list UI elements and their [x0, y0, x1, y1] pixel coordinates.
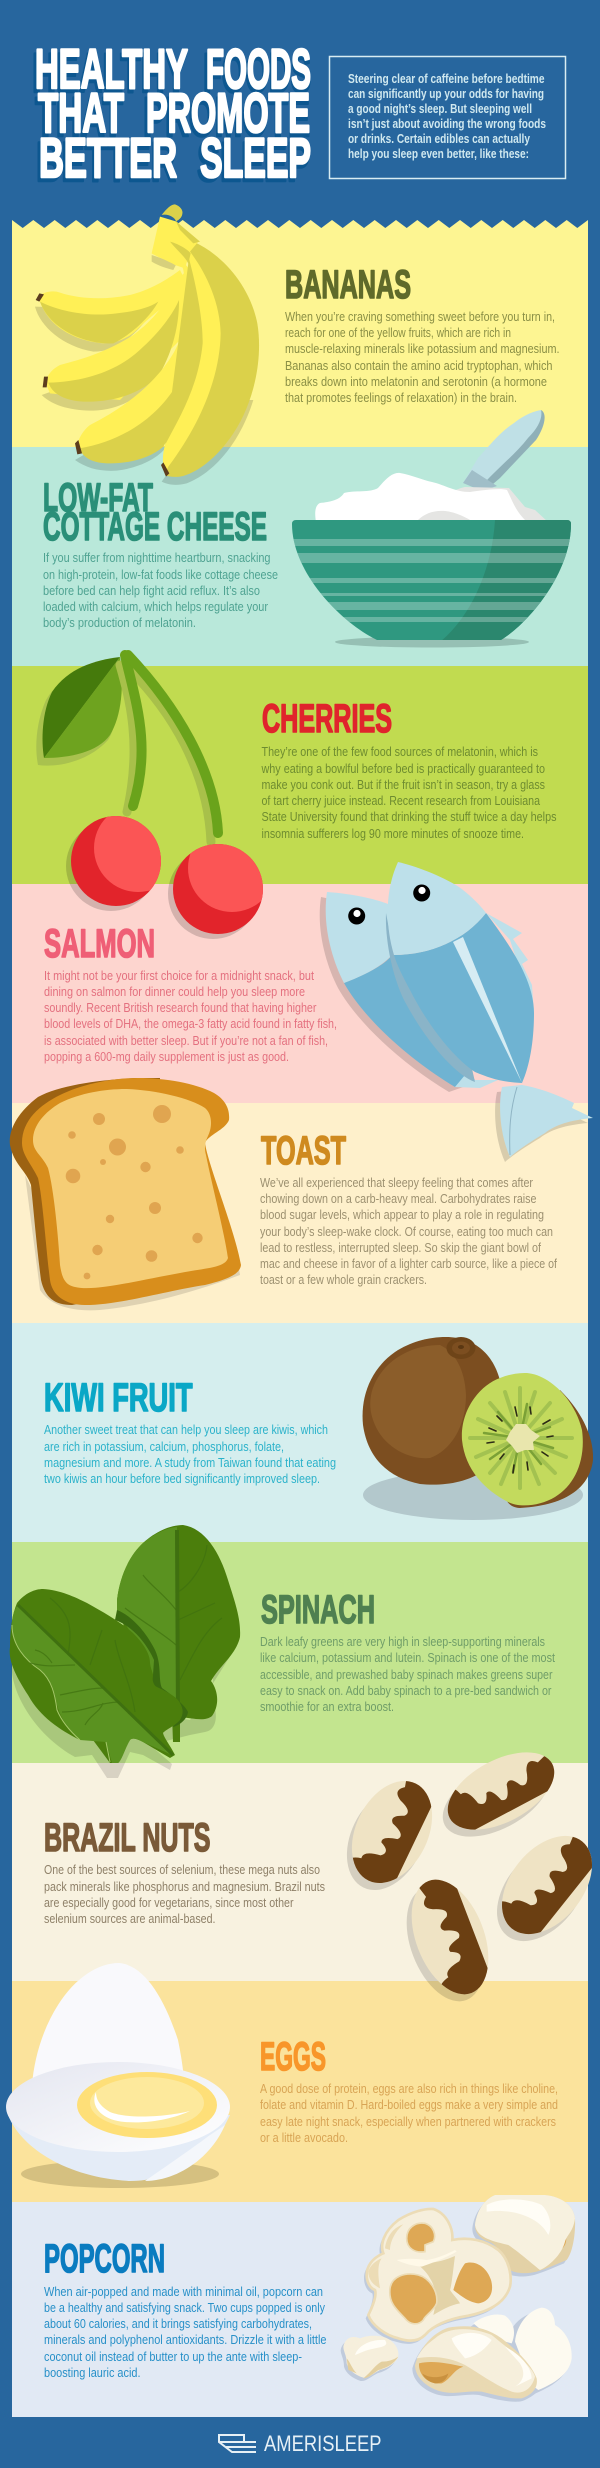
section: eggs text [260, 2035, 558, 2145]
body: salmon: It might not be your first choice for a midnight snack, but [44, 969, 314, 983]
body: brazil nuts: selenium sources are animal-based. [44, 1912, 216, 1926]
heading: cherries: CHERRIES [262, 697, 392, 741]
popcorn piece small [343, 2336, 398, 2378]
half egg [6, 2062, 230, 2181]
intro text box: isn’t just about avoiding the wrong foods [348, 117, 546, 131]
body: salmon: dining on salmon for dinner could help you sleep more [44, 985, 305, 999]
body: bananas: breaks down into melatonin and serotonin (a hormone [285, 375, 547, 389]
heading: toast: TOAST [261, 1129, 346, 1173]
body: toast [260, 1176, 557, 1287]
body: cherries: insomnia sufferers log 90 more minutes of snooze time. [262, 827, 524, 841]
section: brazil nuts text [44, 1816, 325, 1926]
popcorn piece centre [367, 2209, 511, 2341]
title: PROMOTE [146, 81, 310, 144]
illustration: eggs [6, 1963, 230, 2188]
footer logo [219, 2431, 382, 2456]
body: bananas: When you’re craving something sweet before you turn in, [285, 310, 555, 324]
body: popcorn: minerals and polyphenol antioxidants. Drizzle it with a little [44, 2333, 327, 2347]
body: cottage cheese: body’s production of melatonin. [43, 616, 196, 630]
body: toast: toast or a few whole grain crackers. [260, 1273, 427, 1287]
heading: popcorn: POPCORN [44, 2237, 165, 2281]
illustration: brazil nuts [347, 1752, 592, 2002]
front leaf [10, 1589, 183, 1763]
body: bananas: muscle-relaxing minerals like potassium and magnesium. [285, 342, 560, 356]
body: kiwi: Another sweet treat that can help you sleep are kiwis, which [44, 1423, 328, 1437]
body: bananas: Bananas also contain the amino acid tryptophan, which [285, 359, 553, 373]
illustration: popcorn [341, 2195, 575, 2402]
title [32, 37, 311, 193]
front fish [386, 862, 534, 1083]
body: toast: mac and cheese in favor of a lighter carb source, like a piece of [260, 1257, 557, 1271]
body: spinach: smoothie for an extra boost. [260, 1700, 394, 1714]
body: spinach: easy to snack on. Add baby spinach to a pre-bed sandwich or [260, 1684, 552, 1698]
illustration: toast [10, 1078, 241, 1310]
body: popcorn [44, 2285, 327, 2380]
body: spinach [260, 1635, 555, 1714]
body: brazil nuts: pack minerals like phosphorus and magnesium. Brazil nuts [44, 1880, 325, 1894]
section: cherries text [261, 697, 556, 841]
panel: spinach [12, 1542, 588, 1763]
back leaf [115, 1525, 240, 1742]
body: spinach: accessible, and prewashed baby spinach makes greens super [260, 1668, 552, 1682]
body: cherries: of tart cherry juice instead. Recent research from Louisiana [262, 794, 540, 808]
egg shadow [21, 2160, 219, 2188]
illustration: cherries [36, 655, 276, 939]
body: salmon: popping a 600-mg daily supplement is just as good. [44, 1050, 289, 1064]
body: bananas [285, 310, 560, 405]
body: toast: lead to restless, interrupted sleep. So skip the giant bowl of [260, 1241, 541, 1255]
section: popcorn text [44, 2237, 327, 2380]
nut 3 [497, 1836, 592, 1941]
title: FOODS [203, 41, 311, 104]
heading: salmon: SALMON [44, 922, 155, 966]
title: THAT [35, 85, 123, 148]
cheese [315, 473, 548, 522]
body: bananas: that promotes feelings of relaxation) in the brain. [285, 391, 517, 405]
cherry right [168, 844, 263, 939]
cut kiwi [462, 1373, 593, 1508]
nut 2 [442, 1752, 554, 1836]
section: kiwi text [44, 1376, 336, 1486]
body: toast: chowing down on a carb-heavy meal. Carbohydrates raise [260, 1192, 537, 1206]
intro text box: a good night’s sleep. But sleeping well [348, 102, 532, 116]
heading: low-fat cottage cheese: LOW-FAT [43, 476, 153, 520]
title: SLEEP [197, 130, 310, 193]
cherry left [66, 816, 161, 911]
fish shadow [320, 897, 588, 1162]
body: cottage cheese [43, 551, 278, 630]
heading: spinach: SPINACH [261, 1588, 375, 1632]
back fish [326, 892, 498, 1088]
body: toast: your body’s sleep-wake clock. Of course, eating too much can [260, 1225, 553, 1239]
section: salmon text [44, 922, 337, 1064]
body: eggs: A good dose of protein, eggs are also rich in things like choline, [260, 2082, 558, 2096]
body: kiwi: are rich in potassium, calcium, phosphorus, folate, [44, 1440, 284, 1454]
illustration: bananas [35, 204, 259, 485]
body: brazil nuts: are especially good for vegetarians, since most other [44, 1896, 294, 1910]
eyes [348, 884, 430, 924]
body: eggs: easy late night snack, especially when partnered with crackers [260, 2115, 556, 2129]
title: BETTER [36, 130, 176, 193]
body: bananas: reach for one of the yellow fruits, which are rich in [285, 326, 511, 340]
body: kiwi [44, 1423, 336, 1486]
section: spinach text [260, 1588, 555, 1714]
title: HEALTHY [32, 41, 187, 104]
body: salmon: blood levels of DHA, the omega-3 fatty acid found in fatty fish, [44, 1017, 337, 1031]
body: brazil nuts [44, 1863, 325, 1926]
body: cherries: They’re one of the few food sources of melatonin, which is [262, 745, 538, 759]
panel: toast [12, 1103, 588, 1323]
body: salmon [44, 969, 337, 1064]
body: popcorn: about 60 calories, and it brings satisfying carbohydrates, [44, 2317, 312, 2331]
body: popcorn: When air-popped and made with minimal oil, popcorn can [44, 2285, 323, 2299]
tail [500, 1085, 593, 1157]
intro text box: help you sleep even better, like these: [348, 147, 529, 161]
title: PROMOTE [143, 85, 310, 148]
section: bananas text [285, 263, 560, 405]
body: spinach: Dark leafy greens are very high in sleep-supporting minerals [260, 1635, 545, 1649]
body: salmon: is associated with better sleep. But if you’re not a fan of fish, [44, 1034, 328, 1048]
panel: salmon [12, 884, 588, 1103]
body: popcorn: be a healthy and satisfying snack. Two cups popped is only [44, 2301, 326, 2315]
body: kiwi: magnesium and more. A study from Taiwan found that eating [44, 1456, 336, 1470]
panel: bananas [12, 220, 588, 447]
heading: eggs: EGGS [260, 2035, 326, 2079]
body: eggs [260, 2082, 558, 2145]
illustration: spoon [463, 410, 545, 491]
section: cottage cheese text [43, 476, 278, 630]
body: kiwi: two kiwis an hour before bed significantly improved sleep. [44, 1472, 320, 1486]
icon: mattress stack [219, 2435, 256, 2452]
illustration: spinach [10, 1525, 240, 1778]
body: popcorn: boosting lauric acid. [44, 2366, 140, 2380]
panel: eggs [12, 1981, 588, 2202]
title: BETTER [39, 126, 177, 189]
body: eggs: folate and vitamin D. Hard-boiled eggs make a very simple and [260, 2098, 558, 2112]
body: brazil nuts: One of the best sources of selenium, these mega nuts also [44, 1863, 320, 1877]
popcorn piece bottom right [415, 2308, 572, 2398]
leaf [36, 657, 122, 766]
intro text box: can significantly up your odds for having [348, 87, 544, 101]
section: toast text [260, 1129, 557, 1287]
kiwi shadow [363, 1470, 583, 1520]
stems [120, 655, 218, 842]
title: FOODS [206, 37, 311, 100]
whole egg [32, 1963, 184, 2085]
illustration: fish [320, 862, 593, 1162]
body: cherries [261, 745, 556, 841]
intro text box: or drinks. Certain edibles can actually [348, 132, 530, 146]
panel: cottage cheese [12, 447, 588, 666]
heading: kiwi fruit: KIWI FRUIT [44, 1376, 192, 1420]
body: spinach: like calcium, potassium and lutein. Spinach is one of the most [260, 1651, 555, 1665]
bowl shadow [335, 636, 529, 648]
panel: popcorn [12, 2202, 588, 2417]
illustration: kiwi [363, 1337, 593, 1520]
body: cottage cheese: loaded with calcium, which helps regulate your [43, 600, 268, 614]
body: toast: We’ve all experienced that sleepy feeling that comes after [260, 1176, 533, 1190]
whole kiwi [363, 1337, 503, 1485]
bowl body [285, 520, 580, 645]
popcorn shadow [341, 2198, 572, 2402]
heading: low-fat cottage cheese: COTTAGE CHEESE [43, 505, 267, 549]
heading: bananas: BANANAS [285, 263, 411, 307]
heading: brazil nuts: BRAZIL NUTS [44, 1816, 210, 1860]
body: salmon: soundly. Recent British research found that having higher [44, 1001, 316, 1015]
title: HEALTHY [35, 37, 188, 100]
wordmark: AMERISLEEP [264, 2431, 382, 2456]
popcorn piece top right [475, 2195, 575, 2273]
body: cottage cheese: before bed can help fight acid reflux. It’s also [43, 584, 260, 598]
heading: low-fat cottage cheese [43, 476, 267, 549]
body: cottage cheese: If you suffer from nighttime heartburn, snacking [43, 551, 271, 565]
body: popcorn: coconut oil instead of butter to up the ante with sleep- [44, 2350, 302, 2364]
title: SLEEP [200, 126, 311, 189]
title: THAT [38, 81, 124, 144]
intro text box: Steering clear of caffeine before bedtime [348, 72, 545, 86]
illustration: cottage cheese bowl [285, 473, 580, 648]
panel: brazil nuts [12, 1763, 588, 1981]
body: cherries: make you conk out. But if the fruit isn’t in season, try a glass [262, 778, 545, 792]
nut 1 [347, 1781, 432, 1890]
body: cherries: State University found that drinking the stuff twice a day helps [262, 810, 556, 824]
body: toast: blood sugar levels, which appear to play a role in regulating [260, 1208, 544, 1222]
body: cottage cheese: on high-protein, low-fat foods like cottage cheese [43, 568, 278, 582]
panel: cherries [12, 666, 588, 884]
intro text box [330, 56, 566, 178]
body: eggs: or a little avocado. [260, 2131, 348, 2145]
nut 4 [406, 1880, 488, 2002]
panel: kiwi fruit [12, 1323, 588, 1542]
body: cherries: why eating a bowlful before bed is practically guaranteed to [261, 762, 545, 776]
